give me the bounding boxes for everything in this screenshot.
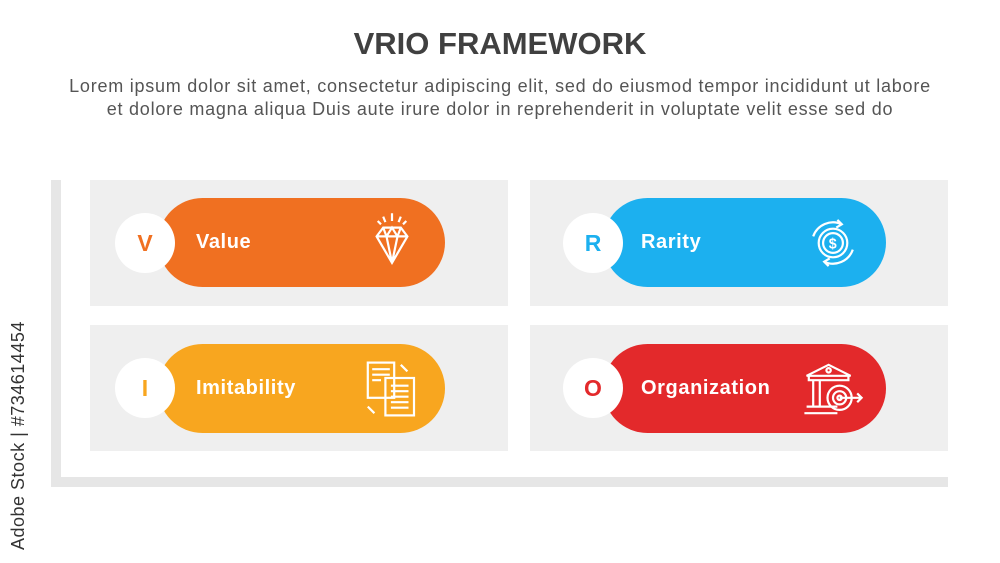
subtitle text: et dolore magna aliqua Duis aute irure dolor in reprehenderit in voluptate velit esse sed do	[107, 99, 893, 119]
pill: organization	[603, 344, 886, 433]
pill: rarity: Rarity	[641, 231, 701, 253]
panel: rarity	[530, 180, 948, 306]
icon: diamond	[375, 213, 409, 265]
circle: I	[115, 358, 175, 418]
icon: bank target	[804, 364, 864, 414]
circle: R	[563, 213, 623, 273]
pill: imitability	[158, 344, 445, 433]
icon: coin cycle	[812, 219, 854, 267]
circle: I: I	[142, 375, 148, 401]
circle: V	[115, 213, 175, 273]
watermark: vertical stock text: Adobe Stock | #734614454	[8, 321, 28, 550]
panel: value	[90, 180, 508, 306]
icon: coin cycle: $	[829, 236, 837, 252]
pill: rarity	[603, 198, 886, 287]
subtitle text	[69, 76, 931, 119]
pill: value: Value	[196, 231, 251, 253]
title: VRIO FRAMEWORK	[354, 26, 646, 61]
circle: V: V	[137, 230, 153, 256]
subtitle text: Lorem ipsum dolor sit amet, consectetur adipiscing elit, sed do eiusmod tempor incididunt ut labore	[69, 76, 931, 96]
pill: value	[158, 198, 445, 287]
circle: O: O	[584, 375, 602, 401]
axis: L-shape	[51, 180, 61, 487]
panel: imitability	[90, 325, 508, 451]
circle: O	[563, 358, 623, 418]
pill: organization: Organization	[641, 377, 770, 399]
icon: documents	[366, 362, 416, 416]
panel: organization	[530, 325, 948, 451]
pill: imitability: Imitability	[196, 377, 296, 399]
circle: R: R	[585, 230, 601, 256]
